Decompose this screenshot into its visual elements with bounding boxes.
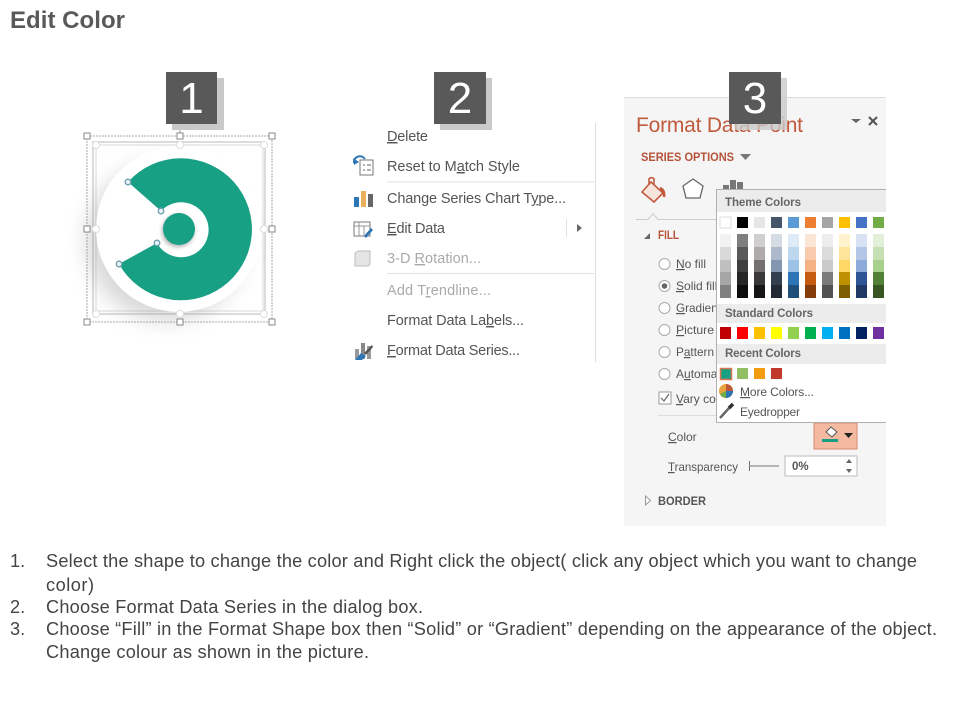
resize handles xyxy=(84,124,275,325)
step 3: 3. xyxy=(10,619,25,639)
title: Edit Color xyxy=(10,7,125,34)
step 1: Select the shape to change the color and Right click the object( click any object which you want to change xyxy=(46,551,917,571)
border heading: BORDER xyxy=(658,494,706,508)
transparency control: 0% xyxy=(792,461,809,473)
menu labels: Format Data Series... xyxy=(387,343,520,359)
more colors: More Colors... xyxy=(740,385,814,399)
fill options xyxy=(659,257,735,406)
step badge 2: 2 xyxy=(448,74,472,123)
panel: selected donut shape xyxy=(84,124,275,325)
instructions list xyxy=(10,551,937,662)
pane title: Format Data Point xyxy=(636,114,803,137)
menu labels xyxy=(387,129,566,359)
fill heading xyxy=(644,228,679,242)
step badge 3: 3 xyxy=(743,74,767,123)
step 1: 1. xyxy=(10,551,25,571)
icon: format series xyxy=(355,343,373,360)
step 1 xyxy=(10,551,917,595)
popup headers: Theme Colors xyxy=(725,197,801,209)
colour picker popup xyxy=(716,190,886,422)
popup headers xyxy=(717,190,886,364)
fill options: Picture xyxy=(676,323,714,337)
fill options: Gradient xyxy=(676,301,722,315)
fill options: No fill xyxy=(676,257,706,271)
step 3: Change colour as shown in the picture. xyxy=(46,642,369,662)
menu labels: 3-D Rotation... xyxy=(387,251,481,267)
step 3 xyxy=(10,619,937,662)
icon: effects tab xyxy=(683,179,703,198)
menu labels: Change Series Chart Type... xyxy=(387,191,566,207)
submenu arrow xyxy=(566,219,582,237)
step badge 3 xyxy=(729,72,787,130)
icon: fill tab xyxy=(642,178,664,202)
icon: reset xyxy=(353,156,373,175)
fill heading: FILL xyxy=(658,228,679,242)
step badge 1 xyxy=(166,72,224,130)
colour button xyxy=(668,423,857,449)
standard colour swatches xyxy=(720,327,884,339)
transparency control: Transparency xyxy=(668,460,738,474)
theme colour swatches xyxy=(720,217,884,298)
colour button: Color xyxy=(668,430,697,444)
icon: edit data xyxy=(354,222,373,238)
step 3: Choose “Fill” in the Format Shape box then “Solid” or “Gradient” depending on the appearance of the object. xyxy=(46,619,937,639)
panel: context menu xyxy=(353,123,596,362)
icon: chart type xyxy=(354,191,373,207)
donut shadow xyxy=(86,161,246,321)
step 2: Choose Format Data Series in the dialog box. xyxy=(46,597,423,617)
fill options: Automatic xyxy=(676,367,729,381)
selection frame xyxy=(87,136,272,322)
step badge 2 xyxy=(434,72,492,130)
popup headers: Recent Colors xyxy=(725,348,801,360)
icon: series tab xyxy=(723,180,743,190)
donut centre xyxy=(162,213,195,247)
white disc xyxy=(96,146,262,312)
menu labels: Reset to Match Style xyxy=(387,159,520,175)
step 2: 2. xyxy=(10,597,25,617)
panel: format data point xyxy=(624,97,886,526)
series options: SERIES OPTIONS xyxy=(641,150,734,164)
icon: 3-D rotation xyxy=(355,251,370,266)
step badge 1: 1 xyxy=(179,74,204,123)
green ring segment xyxy=(119,158,252,300)
menu labels: Add Trendline... xyxy=(387,283,491,299)
fill options: Vary colors xyxy=(676,392,735,406)
menu labels: Edit Data xyxy=(387,221,446,237)
popup headers: Standard Colors xyxy=(725,308,813,320)
adjust handles xyxy=(116,179,164,267)
menu labels: Delete xyxy=(387,129,428,145)
pane controls xyxy=(851,117,877,125)
step 1: color) xyxy=(46,575,94,595)
eyedropper: Eyedropper xyxy=(740,405,800,419)
fill options: Solid fill xyxy=(676,279,717,293)
recent colour swatches xyxy=(720,368,782,380)
transparency control xyxy=(668,456,857,476)
fill options: Pattern xyxy=(676,345,714,359)
menu labels: Format Data Labels... xyxy=(387,313,524,329)
